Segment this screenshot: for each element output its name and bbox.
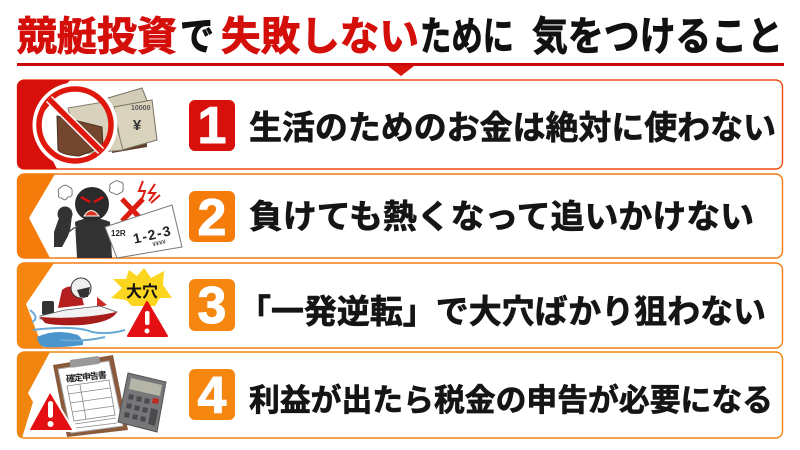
icon: angry man with betting ticket: 1-2-3 [131, 222, 172, 247]
number badge 2: 2 [198, 189, 226, 247]
icon: 大穴 burst [111, 268, 172, 306]
title [17, 15, 783, 59]
row 2 text: 負けても熱くなって追いかけない [249, 198, 754, 235]
number badge 2 [189, 189, 235, 247]
number badge 1 [189, 97, 235, 155]
number badge 4: 4 [198, 367, 227, 425]
panel: row 3 [17, 263, 782, 348]
title: で [180, 15, 214, 59]
icon: banned wallet and banknotes: 10000 [131, 105, 151, 112]
icon: warning triangle [128, 302, 167, 336]
icon: calculator [118, 373, 166, 432]
panel: row 2 [17, 174, 782, 258]
number badge 3 [189, 277, 235, 335]
row 3 text: 「一発逆転」で大穴ばかり狙わない [238, 293, 766, 330]
icon: angry man with betting ticket: ¥¥¥¥ [152, 239, 167, 248]
row 2 colour tab [17, 174, 55, 258]
number badge 3: 3 [198, 277, 226, 335]
title: 競艇投資 [17, 15, 177, 59]
row 4 colour tab [17, 352, 50, 438]
row 3 colour tab [17, 263, 54, 348]
icon: banned wallet and banknotes [34, 84, 157, 166]
heading rule with pointer [17, 63, 784, 76]
title: ために [420, 15, 514, 59]
panel: row 4 [17, 352, 782, 438]
icon: warning triangle [28, 391, 74, 431]
title: 失敗しない [221, 15, 419, 59]
icon: tax return clipboard [53, 355, 128, 437]
icon: tax return clipboard: 確定申告書 [65, 369, 107, 384]
icon: angry man with betting ticket: 12R [111, 229, 126, 238]
row 4 text: 利益が出たら税金の申告が必要になる [249, 383, 773, 418]
row 1 text: 生活のためのお金は絶対に使わない [249, 109, 776, 146]
icon: banned wallet and banknotes: ¥ [133, 117, 142, 134]
number badge 1: 1 [198, 97, 226, 155]
icon: angry man with betting ticket [54, 181, 182, 258]
icon: racing boat on waves [30, 278, 125, 347]
number badge 4 [189, 367, 235, 425]
row 1 colour tab [17, 80, 70, 169]
panel: row 1 [17, 80, 782, 169]
icon: 大穴 burst: 大穴 [126, 282, 158, 301]
